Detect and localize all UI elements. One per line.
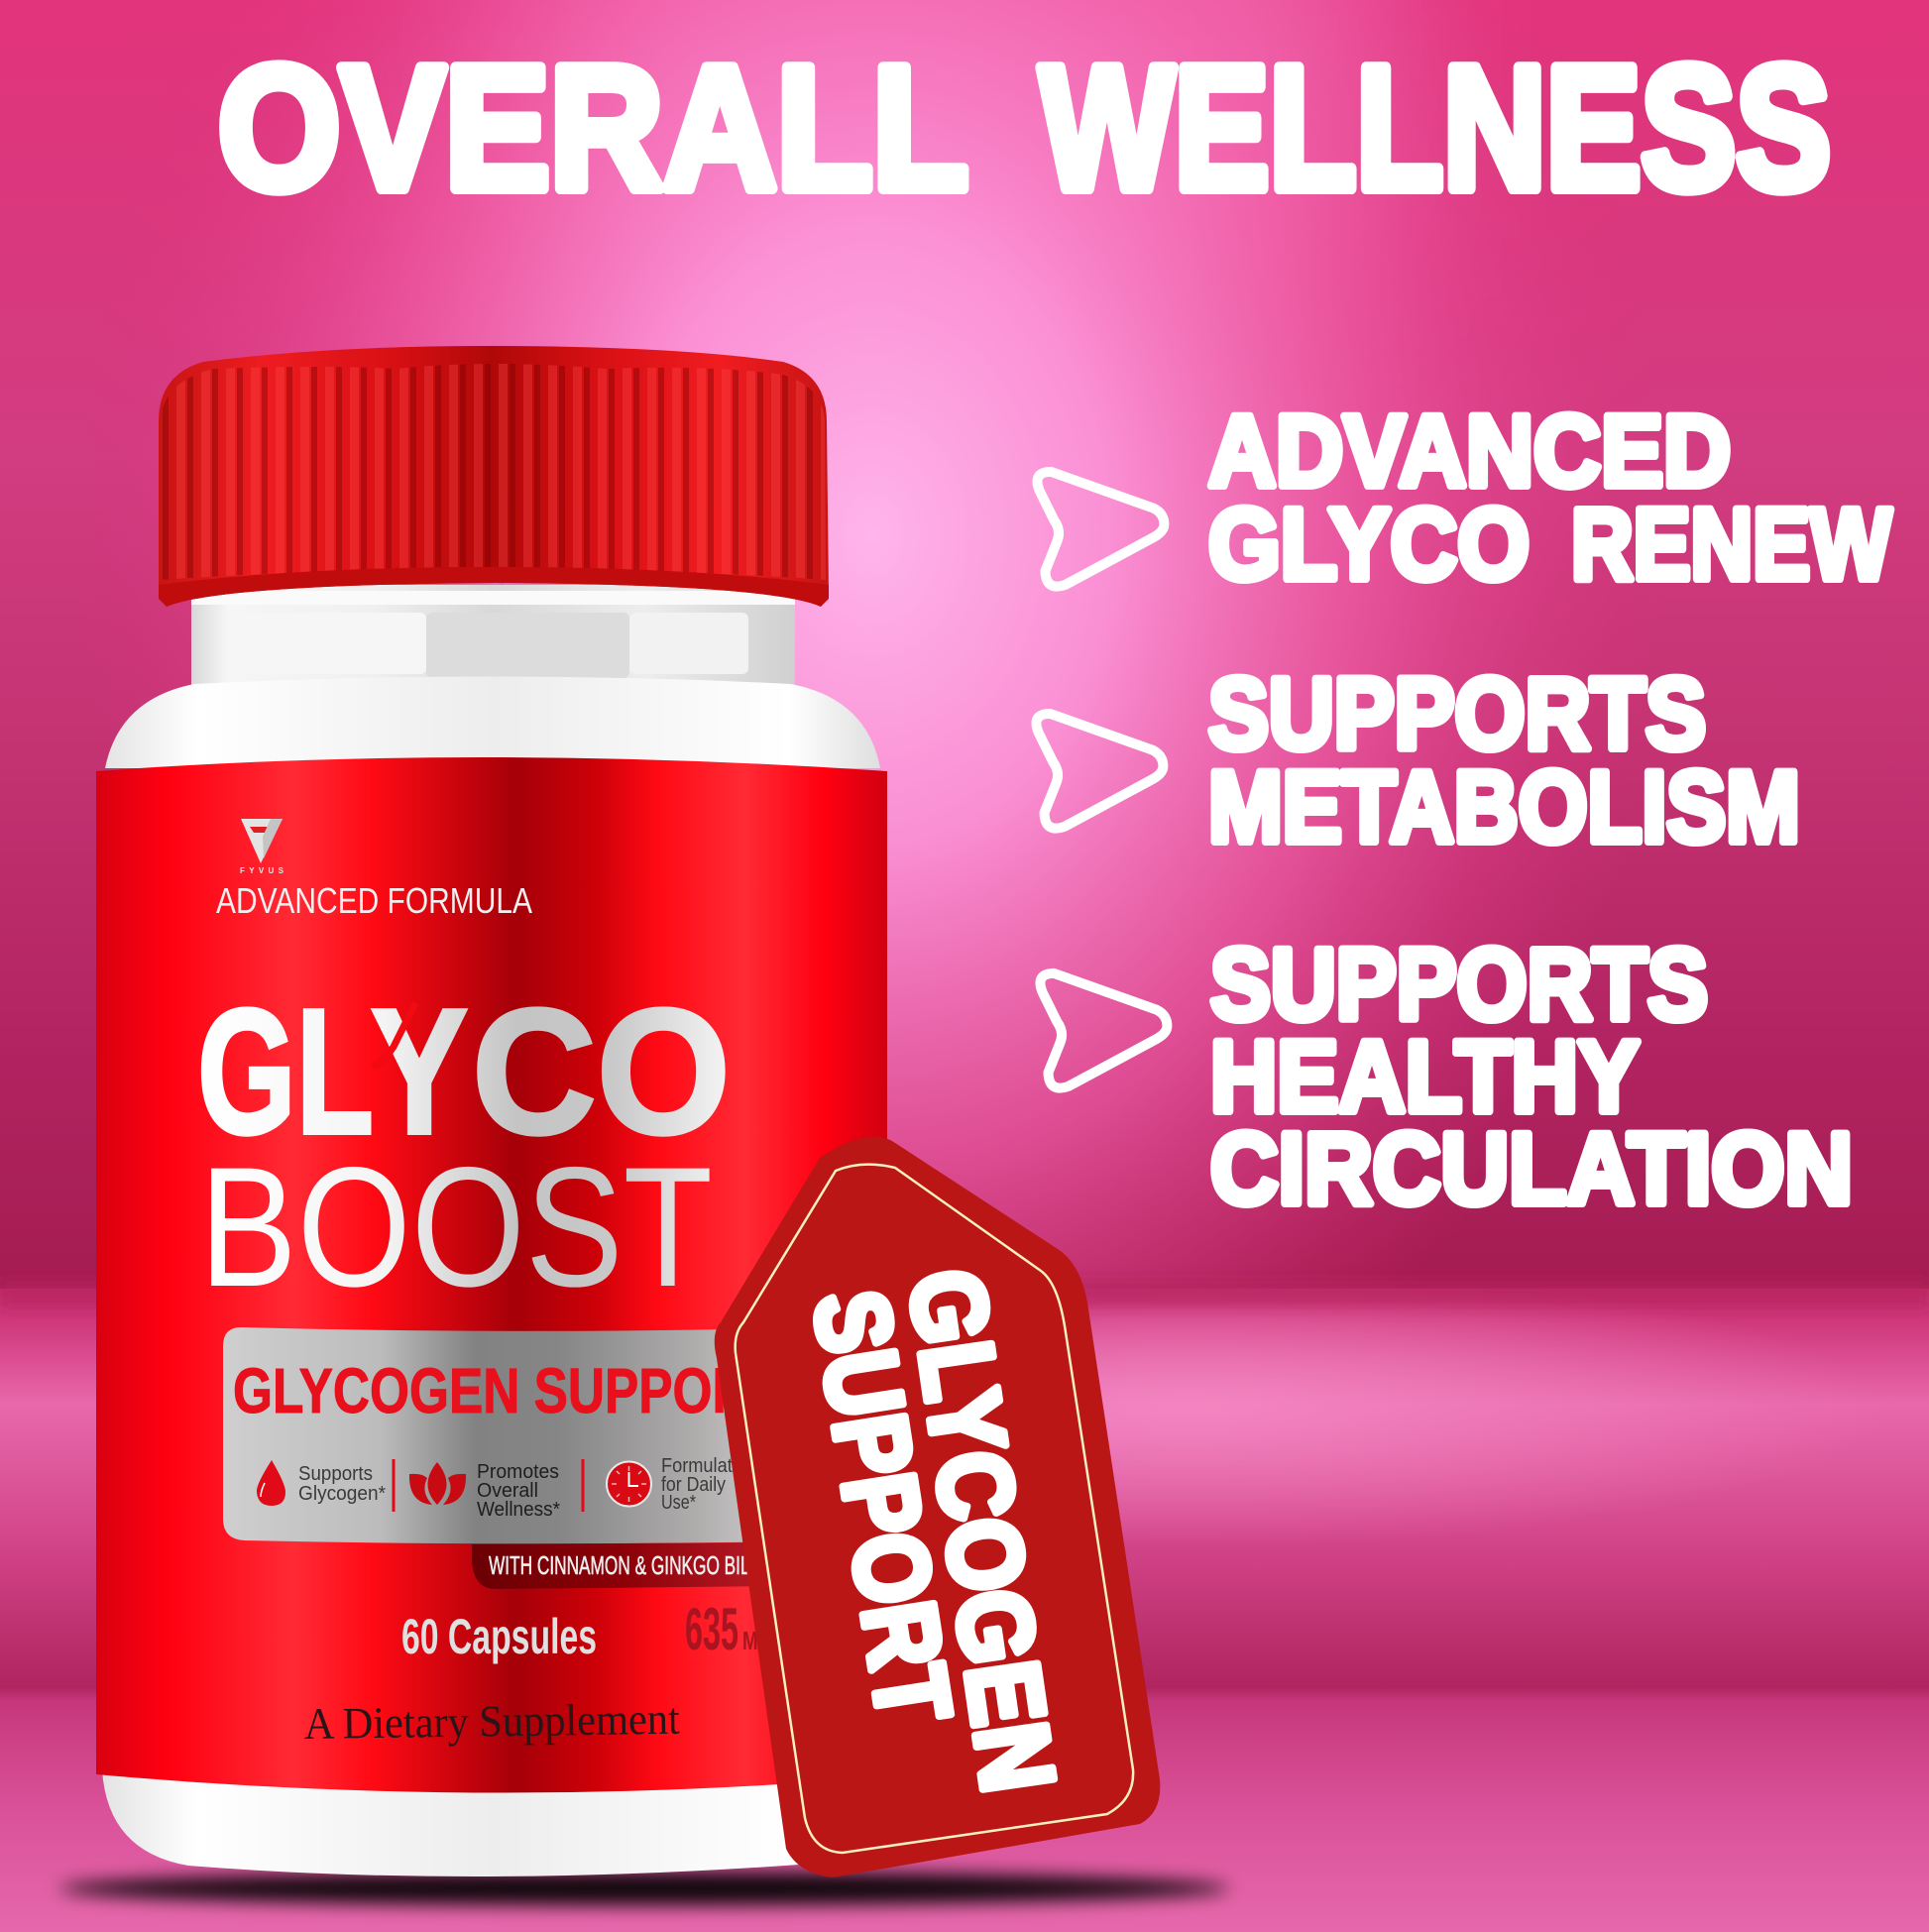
panel text: promotes overall wellness: Overall [477, 1480, 538, 1502]
icon: clock [607, 1461, 651, 1507]
panel text: promotes overall wellness: Wellness* [477, 1499, 560, 1521]
dosage: 635 [685, 1596, 738, 1662]
panel text: formulated for daily use: Formulated [661, 1455, 752, 1477]
product bottle [96, 346, 887, 1876]
tag stitched border [736, 1165, 1133, 1853]
icon: arrow 1 [1037, 472, 1164, 587]
brand name: glyco: Y [371, 972, 468, 1172]
bottle base [102, 1769, 872, 1876]
panel text: promotes overall wellness: Promotes [477, 1461, 559, 1483]
bottle neck [191, 585, 795, 694]
benefit list [1036, 395, 1892, 1225]
benefit text 3: HEALTHY [1210, 1020, 1640, 1133]
benefit text 2 [1208, 657, 1800, 863]
benefit text 1: GLYCO [1208, 488, 1530, 601]
title [218, 30, 1831, 226]
tag text: SUPPORT [791, 1284, 972, 1730]
capsule count: 60 Capsules [401, 1609, 597, 1664]
dosage: MG [742, 1626, 772, 1655]
panel text: formulated for daily use: Use* [661, 1492, 696, 1514]
bottle cap [159, 346, 829, 607]
icon: brand logo: FYVUS [240, 866, 284, 875]
brand name: glyco [197, 972, 731, 1172]
benefit 2: supports metabolism [1036, 657, 1800, 863]
benefit text 3: CIRCULATION [1210, 1112, 1853, 1225]
hang tag: glycogen support [715, 1137, 1160, 1877]
panel text: formulated for daily use: for Daily [661, 1474, 726, 1496]
panel text: promotes overall wellness [477, 1461, 560, 1521]
benefit 1: advanced glyco renew [1037, 395, 1892, 601]
divider [393, 1459, 395, 1512]
ground shadow [59, 1872, 1229, 1905]
panel text: supports glycogen: Supports [298, 1463, 373, 1485]
tag text: GLYCOGEN [886, 1263, 1077, 1799]
red label [96, 757, 887, 1793]
benefit text 1: ADVANCED [1208, 395, 1731, 508]
icon: brand logo [240, 819, 284, 875]
benefit text 3: SUPPORTS [1210, 928, 1708, 1041]
brand name: boost: BOOST [199, 1132, 713, 1322]
ingredients strip [472, 1542, 786, 1589]
tag body [715, 1137, 1160, 1877]
panel text: supports glycogen: Glycogen* [298, 1483, 386, 1505]
label text: advanced formula: ADVANCED FORMULA [216, 880, 532, 921]
stylised slit in the Y [373, 1003, 415, 1067]
bottle shoulder [105, 676, 880, 768]
benefit 3: supports healthy circulation [1040, 928, 1853, 1225]
icon: arrow 2 [1036, 714, 1163, 829]
icon: lotus [409, 1462, 466, 1505]
divider [581, 1459, 585, 1512]
strip text: WITH CINNAMON & GINKGO BILOBA [489, 1550, 786, 1580]
icon: blood drop [257, 1460, 285, 1506]
panel text: formulated for daily use [661, 1455, 752, 1514]
icon: arrow 3 [1040, 973, 1167, 1088]
panel text: supports glycogen [298, 1463, 386, 1505]
title: OVERALL [218, 30, 968, 226]
dietary supplement line: A Dietary Supplement [303, 1694, 681, 1749]
benefit text 2: SUPPORTS [1208, 657, 1706, 770]
brand name: glyco: CO [472, 972, 731, 1172]
tag text [791, 1263, 1077, 1799]
panel heading: glycogen support: GLYCOGEN SUPPORT [233, 1355, 780, 1426]
benefit text 3 [1210, 928, 1853, 1225]
benefit text 1 [1208, 395, 1892, 601]
brand name: glyco: GL [197, 972, 374, 1172]
benefit text 2: METABOLISM [1208, 750, 1800, 863]
silver panel [223, 1327, 788, 1543]
